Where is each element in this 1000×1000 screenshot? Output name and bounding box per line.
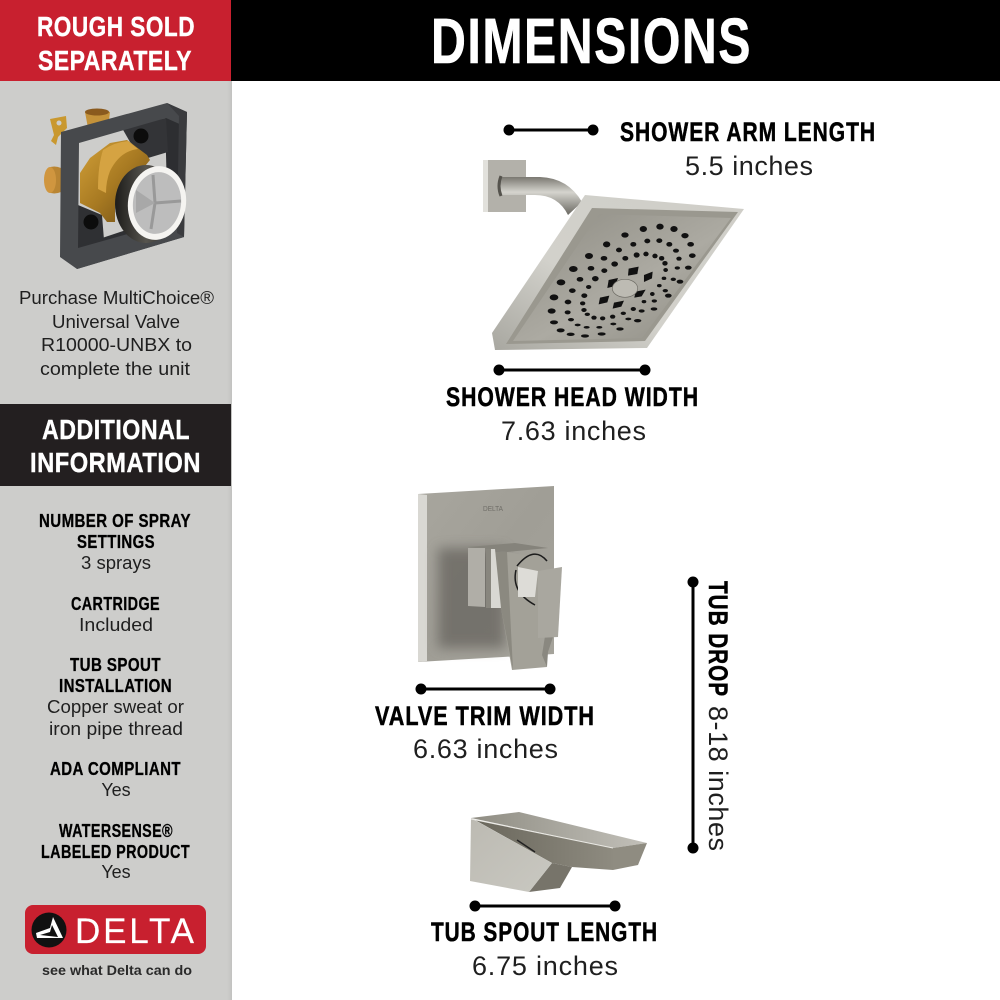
dimension: tub drop: 8-18 inches	[703, 706, 733, 851]
rough sold separately banner: ROUGH SOLD	[37, 11, 195, 42]
spec: watersense: Yes	[101, 862, 131, 882]
valve purchase note: Purchase MultiChoice®	[19, 288, 214, 308]
spec: tub spout installation: INSTALLATION	[59, 676, 172, 696]
spec: watersense: WATERSENSE®	[59, 821, 173, 841]
spec: cartridge	[71, 594, 160, 635]
dimension: tub spout length	[431, 900, 658, 981]
spec: tub spout installation: Copper sweat or	[47, 697, 184, 717]
spec: ada compliant: ADA COMPLIANT	[50, 759, 181, 779]
shower head body	[492, 195, 744, 350]
dimension: shower head width: 7.63 inches	[501, 416, 646, 446]
additional information banner	[0, 404, 231, 486]
trim plate	[418, 486, 554, 662]
dimension: valve trim width: 6.63 inches	[413, 734, 558, 764]
delta logo: DELTA	[75, 912, 195, 951]
front frame	[60, 103, 187, 269]
sidebar panel	[0, 0, 232, 1000]
valve purchase note: complete the unit	[40, 359, 190, 379]
shower arm	[500, 177, 582, 215]
valve purchase note	[19, 288, 214, 379]
spec: cartridge: CARTRIDGE	[71, 594, 160, 614]
valve purchase note: R10000-UNBX to	[41, 335, 192, 355]
mounting screws	[134, 128, 148, 144]
dimension: tub spout length: 6.75 inches	[472, 951, 618, 981]
dimension: tub spout length: TUB SPOUT LENGTH	[431, 917, 658, 947]
spec: number of spray settings: NUMBER OF SPRAY	[39, 511, 191, 531]
title bar	[231, 0, 1000, 81]
spec: cartridge: Included	[79, 615, 153, 635]
icon: rough-in valve	[44, 103, 191, 269]
dimension: shower arm length: 5.5 inches	[685, 151, 813, 181]
dimension: shower head width: SHOWER HEAD WIDTH	[446, 382, 699, 412]
title bar: DIMENSIONS	[431, 5, 752, 77]
spec: number of spray settings: 3 sprays	[81, 553, 151, 573]
shower head illustration	[483, 160, 744, 350]
valve trim illustration	[418, 486, 562, 670]
dimension: valve trim width: VALVE TRIM WIDTH	[375, 701, 595, 731]
dimension: shower head width	[446, 364, 699, 446]
tub spout illustration	[470, 812, 647, 892]
brass body	[80, 140, 150, 222]
dimension: tub drop: TUB DROP	[703, 581, 733, 697]
delta logo	[25, 905, 206, 978]
rough sold separately banner: SEPARATELY	[38, 45, 192, 76]
handle	[468, 543, 562, 670]
additional information banner: INFORMATION	[30, 447, 201, 478]
spec: watersense: LABELED PRODUCT	[41, 842, 190, 862]
label: delta engraving: DELTA	[483, 504, 503, 513]
dimension: shower arm length: SHOWER ARM LENGTH	[620, 117, 876, 147]
delta logo: see what Delta can do	[42, 962, 192, 978]
valve purchase note: Universal Valve	[52, 312, 180, 332]
inner frame walls	[165, 112, 187, 237]
dimension: valve trim width	[375, 684, 595, 764]
spray nozzles	[548, 224, 696, 338]
wall plate	[483, 160, 526, 212]
dimension: shower arm length	[504, 117, 876, 181]
spec: tub spout installation: iron pipe thread	[49, 719, 183, 739]
white cartridge	[115, 165, 177, 243]
rough sold separately banner	[0, 0, 231, 81]
spec: ada compliant	[50, 759, 181, 800]
spec: tub spout installation	[47, 655, 184, 739]
spec: number of spray settings	[39, 511, 191, 573]
spec: watersense	[41, 821, 190, 882]
spec: ada compliant: Yes	[101, 780, 131, 800]
dimension: tub drop	[688, 576, 733, 854]
spec: number of spray settings: SETTINGS	[77, 532, 155, 552]
handle shadow	[438, 548, 505, 648]
spec: tub spout installation: TUB SPOUT	[70, 655, 161, 675]
additional information banner: ADDITIONAL	[42, 414, 190, 445]
